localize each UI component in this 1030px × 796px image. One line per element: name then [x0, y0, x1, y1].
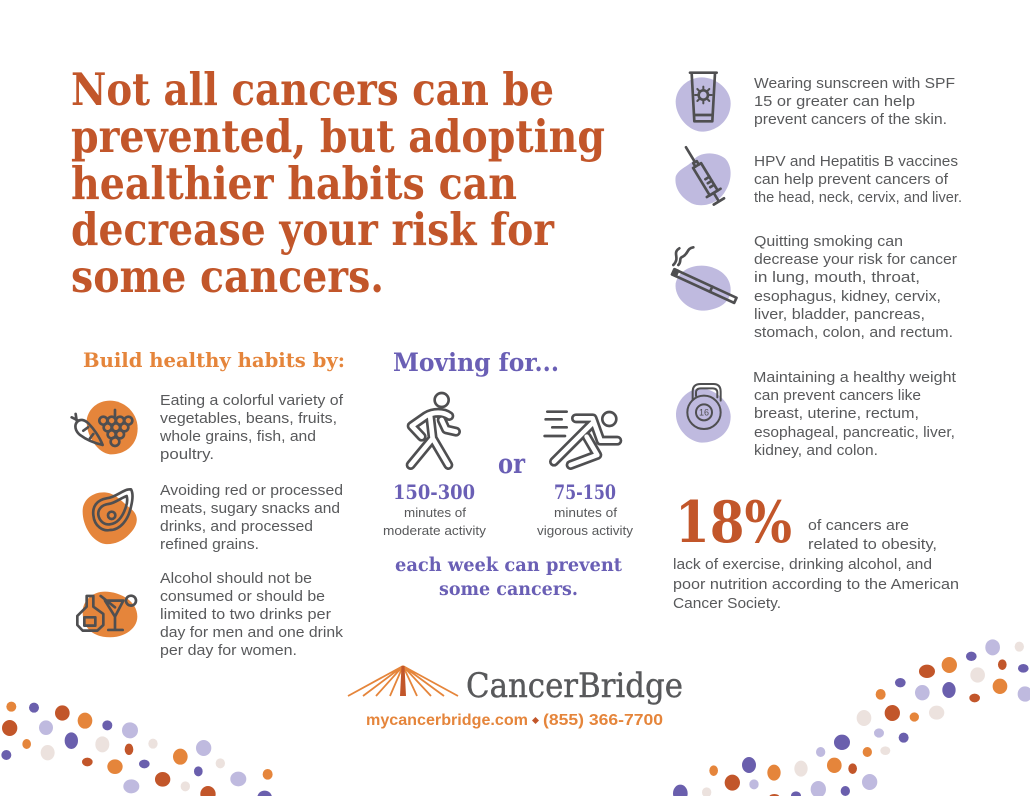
text: quitting smoking: liver, bladder, pancreas, [754, 306, 925, 323]
text: alcohol: day for men and one drink [160, 624, 344, 641]
text: eating: Eating a colorful variety of [160, 392, 344, 409]
text: vaccines: can help prevent cancers of [754, 171, 949, 188]
title: Not all cancers can be [71, 63, 554, 116]
text: alcohol: per day for women. [160, 642, 297, 659]
text: each week can prevent [395, 554, 622, 600]
text: vaccines [754, 153, 962, 206]
text: eating: poultry. [160, 446, 214, 463]
text: sunscreen: prevent cancers of the skin. [754, 111, 947, 128]
title: healthier habits can [71, 157, 517, 210]
text: alcohol: Alcohol should not be [160, 570, 312, 587]
stat: moderate activity: minutes of [404, 505, 466, 520]
text: avoiding [160, 482, 343, 553]
text: eating [159, 392, 344, 463]
stat: moderate activity [383, 480, 487, 538]
text: quitting smoking: decrease your risk for cancer [754, 251, 957, 268]
stat: 18%: 18% [675, 489, 792, 556]
panel: build healthy habits [72, 348, 345, 659]
text: avoiding: drinks, and processed [160, 518, 313, 535]
text: 18 percent explanation: lack of exercise, drinking alcohol, and [673, 556, 932, 573]
text: avoiding: refined grains. [160, 536, 259, 553]
text: 18 percent explanation: of cancers are [808, 517, 909, 534]
stat: moderate activity: moderate activity [383, 523, 487, 538]
panel: prevention tips [672, 73, 962, 612]
text: each week can prevent: each week can prevent [395, 554, 622, 576]
heading: moving for: Moving for... [393, 348, 559, 377]
text: each week can prevent: some cancers. [439, 578, 578, 600]
icon: sunscreen tube [676, 73, 731, 132]
text: quitting smoking: esophagus, kidney, cervix, [754, 288, 941, 305]
text: sunscreen: 15 or greater can help [754, 93, 915, 110]
logo: CancerBridge [348, 666, 683, 729]
text: healthy weight: kidney, and colon. [754, 442, 878, 459]
icon: cigarette [672, 247, 737, 311]
contact line [366, 712, 663, 729]
text: 18 percent explanation [673, 517, 959, 612]
icon: bottle and martini glass [77, 592, 137, 637]
text: eating: whole grains, fish, and [159, 428, 316, 445]
text: healthy weight: can prevent cancers like [754, 387, 921, 404]
text: quitting smoking [754, 233, 957, 341]
text: sunscreen [754, 75, 955, 128]
text: 18 percent explanation: poor nutrition according to the American [673, 576, 959, 593]
decoration: dots bottom right [673, 639, 1030, 796]
contact line: mycancerbridge.com [366, 712, 528, 729]
text: healthy weight: breast, uterine, rectum, [754, 405, 919, 422]
icon: walking person [411, 393, 456, 465]
stat: vigorous activity: 75-150 [554, 480, 616, 504]
wordmark: CancerBridge [466, 666, 683, 706]
stat: vigorous activity [537, 480, 634, 538]
title: decrease your risk for [71, 203, 555, 256]
icon: steak [83, 489, 137, 544]
text: alcohol: consumed or should be [160, 588, 325, 605]
text: quitting smoking: Quitting smoking can [754, 233, 903, 250]
text: or: or [498, 449, 526, 480]
stat: moderate activity: 150-300 [393, 480, 475, 504]
text: healthy weight [753, 369, 957, 459]
text: alcohol [160, 570, 344, 659]
text: quitting smoking: stomach, colon, and rectum. [754, 324, 953, 341]
stat: vigorous activity: vigorous activity [537, 523, 634, 538]
icon: kettlebell [676, 384, 731, 443]
title [71, 63, 605, 303]
text: quitting smoking: in lung, mouth, throat, [754, 269, 920, 286]
text: vaccines: the head, neck, cervix, and liver. [754, 189, 962, 206]
title: some cancers. [71, 250, 384, 303]
text: avoiding: meats, sugary snacks and [160, 500, 340, 517]
text: vaccines: HPV and Hepatitis B vaccines [754, 153, 958, 170]
text: avoiding: Avoiding red or processed [160, 482, 343, 499]
contact line: (855) 366-7700 [543, 712, 663, 729]
text: 18 percent explanation: related to obesity, [808, 536, 937, 553]
icon: syringe [675, 143, 731, 206]
heading: build healthy habits: Build healthy habits by: [83, 348, 345, 372]
panel: moving for [383, 348, 634, 600]
title: prevented, but adopting [71, 110, 605, 163]
text: sunscreen: Wearing sunscreen with SPF [754, 75, 955, 92]
decoration: dots bottom left [1, 702, 273, 796]
text: alcohol: limited to two drinks per [160, 606, 331, 623]
callout: 18 percent [673, 489, 959, 612]
text: healthy weight: Maintaining a healthy weight [753, 369, 957, 386]
text: 18 percent explanation: Cancer Society. [673, 595, 781, 612]
icon: running person [545, 412, 617, 465]
stat: vigorous activity: minutes of [554, 505, 617, 520]
text: healthy weight: esophageal, pancreatic, liver, [754, 424, 955, 441]
icon: bridge fan [348, 666, 458, 696]
icon: carrot and grapes [72, 401, 138, 454]
icon: kettlebell: 16 [699, 408, 709, 418]
text: eating: vegetables, beans, fruits, [160, 410, 337, 427]
